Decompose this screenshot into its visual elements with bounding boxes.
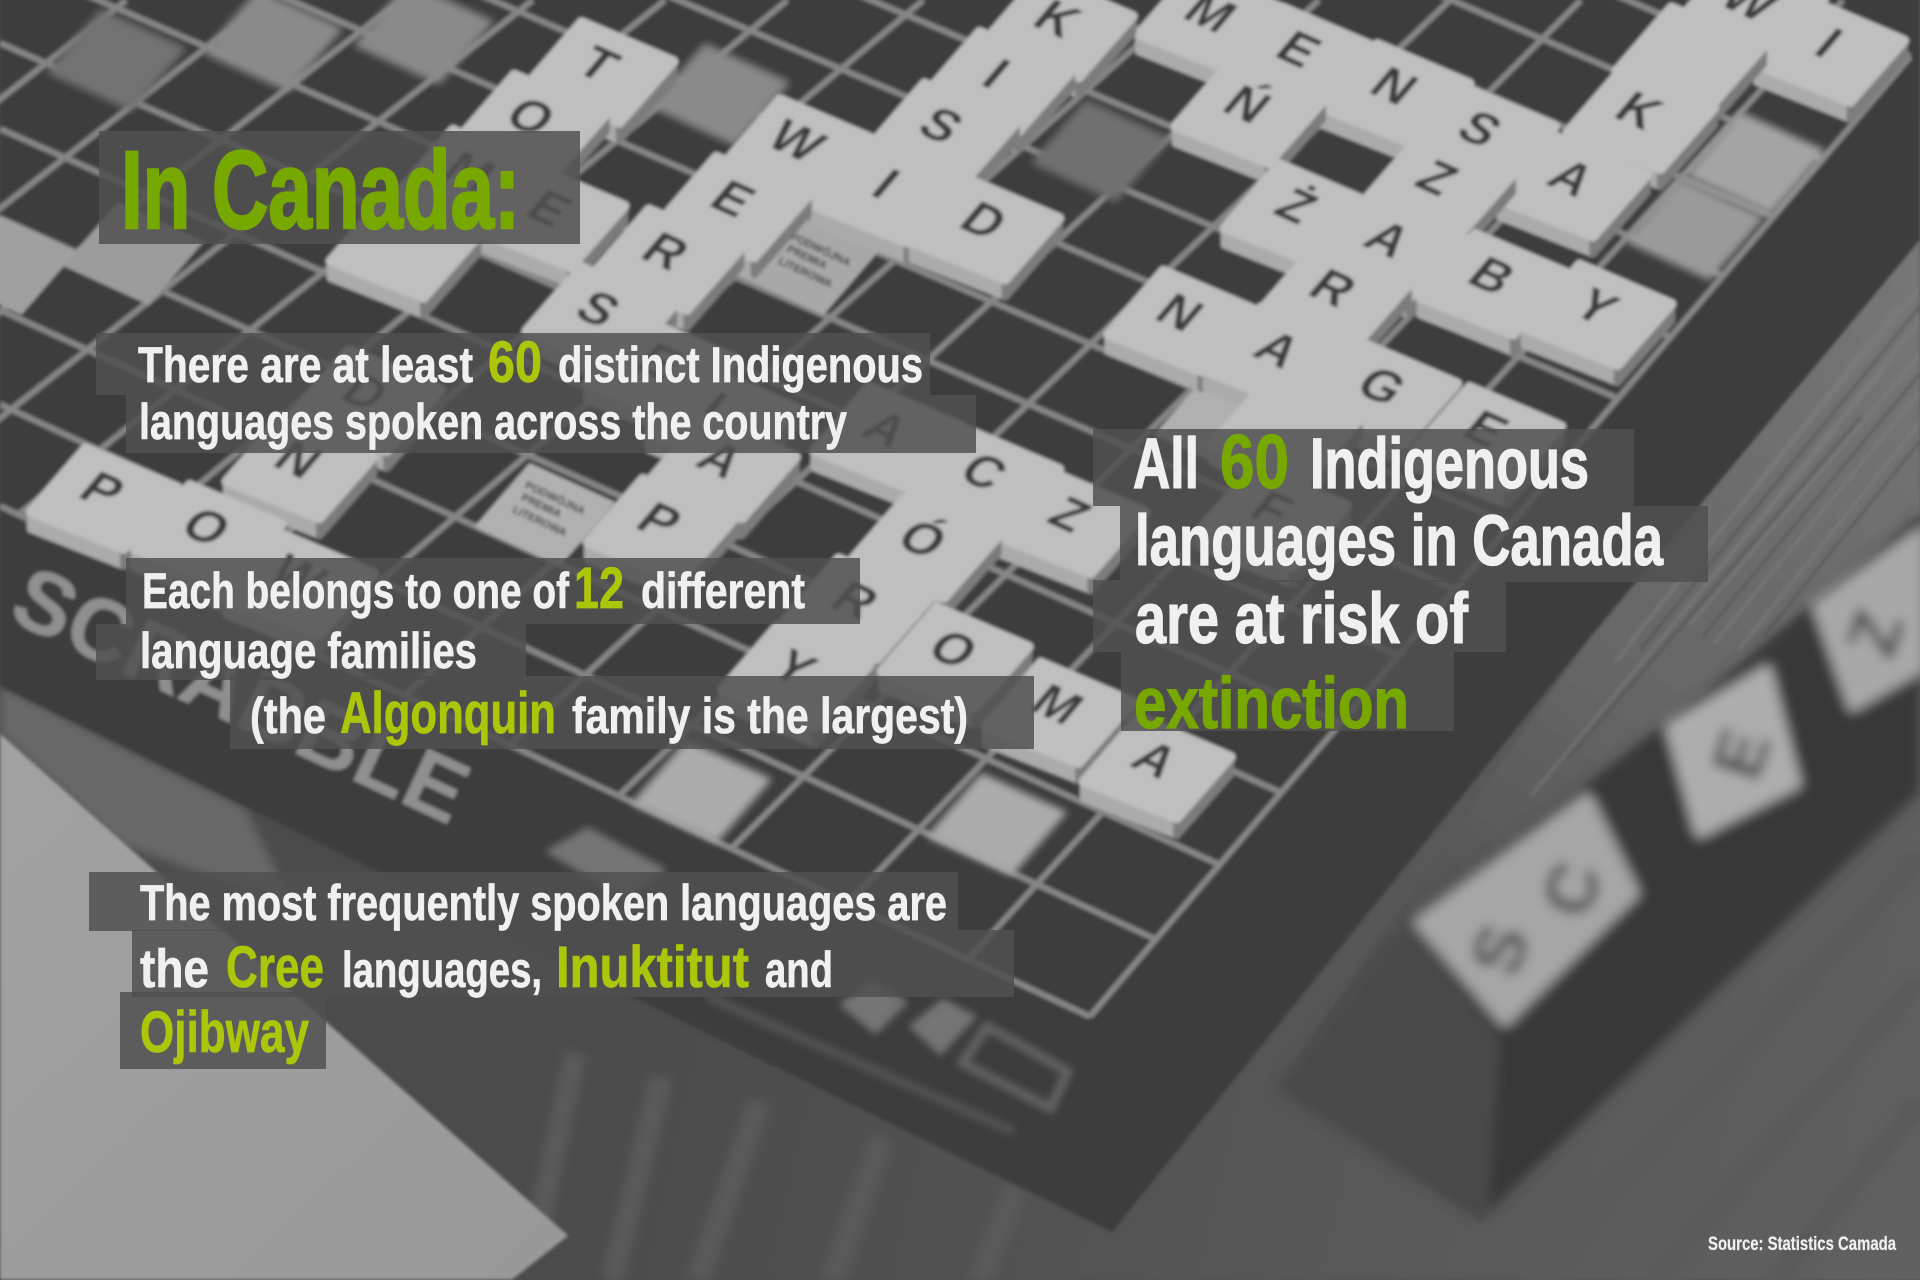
letter tiles: Z [1037, 487, 1102, 542]
text block: 12 language families: language families [140, 623, 477, 679]
callout: all languages at risk: extinction [1134, 664, 1409, 744]
letter tiles: S [565, 281, 632, 337]
text block: 60 distinct languages: 60 [488, 330, 542, 395]
callout: all languages at risk: languages in Canada [1135, 502, 1663, 581]
title: In Canada: [121, 129, 520, 252]
letter tiles: D [331, 363, 400, 421]
letter tiles: E [626, 333, 693, 390]
letter tiles: O [170, 497, 242, 556]
letter tiles: G [1346, 357, 1418, 415]
letter tiles: K [1604, 82, 1674, 139]
text block: most spoken languages: languages, [342, 942, 542, 998]
text block: most spoken languages: Cree [226, 935, 324, 1000]
letter tiles: S [1446, 101, 1513, 157]
letter tiles: O [917, 620, 989, 679]
letter tiles: A [686, 431, 755, 488]
letter tiles: E [1453, 401, 1519, 457]
score track details on board border [545, 827, 1068, 1132]
text block: 60 distinct languages: distinct Indigenous [558, 337, 923, 393]
letter tiles: A [1243, 320, 1313, 378]
bonus squares: PREMIA [785, 243, 829, 272]
letter tiles: I [972, 50, 1021, 98]
bonus squares: PODWÓJNA [523, 478, 587, 518]
letter tiles: E [1265, 21, 1332, 77]
letter tiles: Z [1405, 150, 1469, 205]
letter tiles: W [757, 110, 837, 172]
callout: all languages at risk: are at risk of [1135, 580, 1468, 659]
tile rack [1276, 514, 1920, 1220]
text block: 12 language families: (the [250, 688, 326, 744]
letter tiles: Ó [887, 510, 959, 568]
bonus squares: PODWÓJNA [789, 230, 853, 269]
text block: most spoken languages: The most frequently spoken languages are [140, 875, 947, 931]
letter tiles: Ń [1212, 76, 1282, 133]
bonus squares [0, 0, 1826, 876]
text block: 12 language families [96, 556, 1034, 749]
callout: all languages at risk: 60 [1220, 420, 1289, 505]
wood strip between board and rack [1276, 239, 1920, 1089]
callout: all languages at risk: Indigenous [1310, 425, 1589, 504]
letter tiles: N [1359, 57, 1429, 115]
text block: 60 distinct languages: languages spoken across the country [139, 394, 847, 450]
letter tiles: A [1121, 731, 1190, 788]
board brand text: SCRABBLE [0, 546, 484, 843]
letter tiles: P [626, 492, 693, 549]
callout: all languages at risk [1093, 420, 1708, 744]
letter tiles: E [516, 180, 583, 237]
letter tiles: I [861, 160, 911, 208]
tile rack: E [1697, 719, 1787, 789]
text block: 12 language families: Each belongs to one of [142, 563, 569, 619]
letter tiles: R [631, 223, 700, 280]
letter tiles: M [432, 142, 507, 202]
letter tiles: Y [1563, 278, 1630, 335]
tile rack: S [1456, 915, 1546, 985]
letter tiles: W [258, 545, 339, 607]
text block: 60 distinct languages [96, 330, 976, 453]
letter tiles: S [908, 97, 975, 153]
letter tiles: L [688, 383, 753, 438]
tile rack: Z [1832, 601, 1920, 666]
letter tiles: B [1457, 247, 1527, 304]
text block: most spoken languages: the [140, 939, 209, 999]
text block: 12 language families: Algonquin [340, 681, 556, 746]
letter tiles: Ż [1264, 178, 1328, 234]
letter tiles: P [69, 462, 136, 518]
bonus squares: PREMIA [519, 492, 563, 521]
letter tiles: I [1804, 19, 1853, 67]
letter tiles [31, 0, 1904, 835]
bonus squares: LITEROWA [511, 504, 568, 539]
letter tiles: E [699, 170, 766, 227]
callout: all languages at risk: All [1133, 425, 1199, 504]
text block: 12 language families: family is the largest) [572, 688, 968, 744]
paper sheet [0, 734, 568, 1280]
letter tiles: Y [761, 639, 828, 696]
letter tiles: A [1537, 149, 1606, 207]
letter tiles: N [1145, 284, 1215, 341]
letter tiles: D [949, 192, 1019, 249]
tile rack: C [1527, 853, 1618, 926]
letter tiles: C [949, 443, 1019, 500]
letter tiles: A [851, 400, 921, 458]
letter tiles: R [821, 572, 890, 629]
letter tiles: T [566, 36, 631, 92]
letter tiles: M [1020, 674, 1095, 734]
letter tiles: A [1353, 210, 1423, 268]
text block: most spoken languages: and [765, 942, 833, 998]
wood grain at lower left [0, 686, 1920, 1280]
text block: most spoken languages [89, 872, 1014, 1069]
letter tiles: R [1298, 259, 1368, 317]
text block: 12 language families: 12 [574, 556, 624, 621]
text block: 12 language families: different [641, 563, 805, 619]
letter tiles: O [495, 87, 567, 146]
text block: most spoken languages: Ojibway [140, 1000, 309, 1065]
letter tiles: N [263, 431, 333, 488]
text block: 60 distinct languages: There are at least [138, 337, 473, 393]
letter tiles: F [1240, 481, 1304, 536]
bonus squares: LITEROWA [776, 255, 834, 291]
text block: most spoken languages: Inuktitut [556, 935, 749, 1000]
